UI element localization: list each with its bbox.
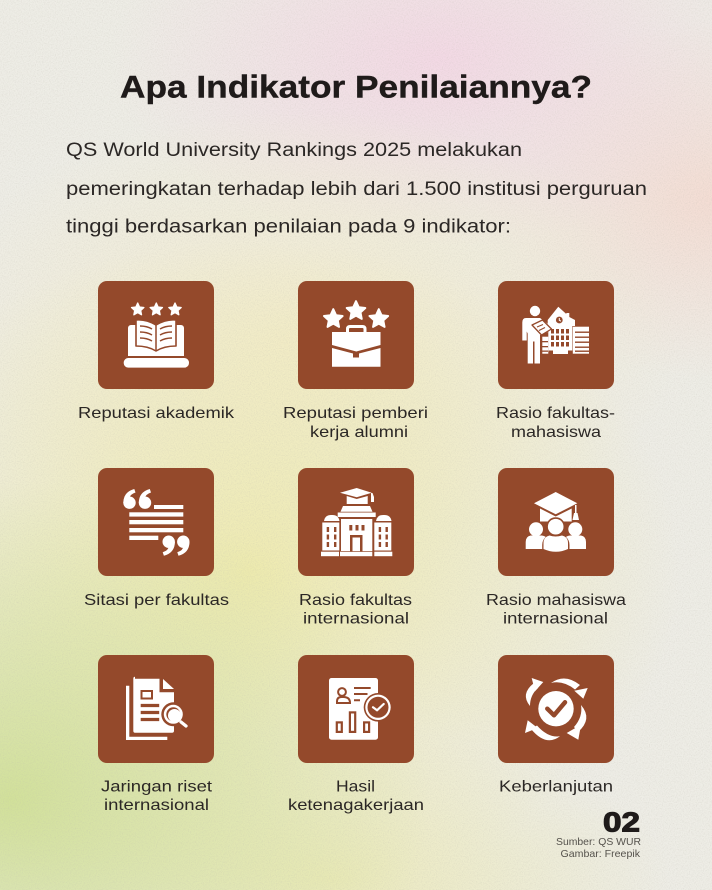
icon: lecturer beside school building <box>522 306 589 364</box>
intro paragraph: QS World University Rankings 2025 melakukan <box>66 140 522 161</box>
label: Reputasi akademik <box>78 405 235 422</box>
source credits <box>556 836 641 860</box>
source credits: Sumber: QS WUR <box>556 836 641 848</box>
label: Jaringan riset <box>101 779 213 796</box>
page number: 02 <box>603 806 640 838</box>
label <box>486 592 626 628</box>
panel: rasio mahasiswa internasional <box>486 468 626 628</box>
icon: documents with magnifier <box>126 677 186 740</box>
label: Rasio fakultas <box>299 592 412 609</box>
source credits: Gambar: Freepik <box>560 848 641 860</box>
label: Hasil <box>336 779 375 796</box>
label: internasional <box>303 610 409 628</box>
icon: circular arrows around check <box>525 678 588 740</box>
label <box>283 405 428 441</box>
label: kerja alumni <box>310 424 408 441</box>
label: Reputasi pemberi <box>283 405 428 422</box>
title: Apa Indikator Penilaiannya? <box>120 69 592 105</box>
icon: university building with graduation cap <box>321 488 392 556</box>
intro paragraph <box>66 140 647 238</box>
label: Rasio mahasiswa <box>486 592 626 609</box>
panel: reputasi akademik <box>78 281 235 422</box>
icon: report card with chart and check <box>329 678 392 740</box>
panel: rasio fakultas internasional <box>298 468 414 628</box>
panel: sitasi per fakultas <box>84 468 229 609</box>
panel: reputasi pemberi kerja alumni <box>283 281 428 441</box>
icon: quotation marks and text lines <box>123 489 190 556</box>
intro paragraph: pemeringkatan terhadap lebih dari 1.500 institusi perguruan <box>66 179 647 200</box>
label: mahasiswa <box>511 424 601 441</box>
icon: students with graduation cap <box>526 492 586 552</box>
label: Rasio fakultas- <box>496 405 615 422</box>
panel: hasil ketenagakerjaan <box>288 655 424 814</box>
label: internasional <box>503 610 608 628</box>
label: internasional <box>104 797 209 814</box>
intro paragraph: tinggi berdasarkan penilaian pada 9 indikator: <box>66 217 511 238</box>
label: ketenagakerjaan <box>288 797 424 814</box>
label <box>101 779 213 814</box>
panel: keberlanjutan <box>498 655 614 796</box>
icon: briefcase with stars <box>324 301 388 367</box>
label: Keberlanjutan <box>499 779 613 796</box>
panel: rasio fakultas-mahasiswa <box>496 281 615 441</box>
label <box>496 405 615 441</box>
icon: open book on laptop with stars <box>124 303 189 368</box>
label <box>299 592 412 628</box>
panel: jaringan riset internasional <box>98 655 214 814</box>
label: Sitasi per fakultas <box>84 592 229 609</box>
label <box>288 779 424 814</box>
